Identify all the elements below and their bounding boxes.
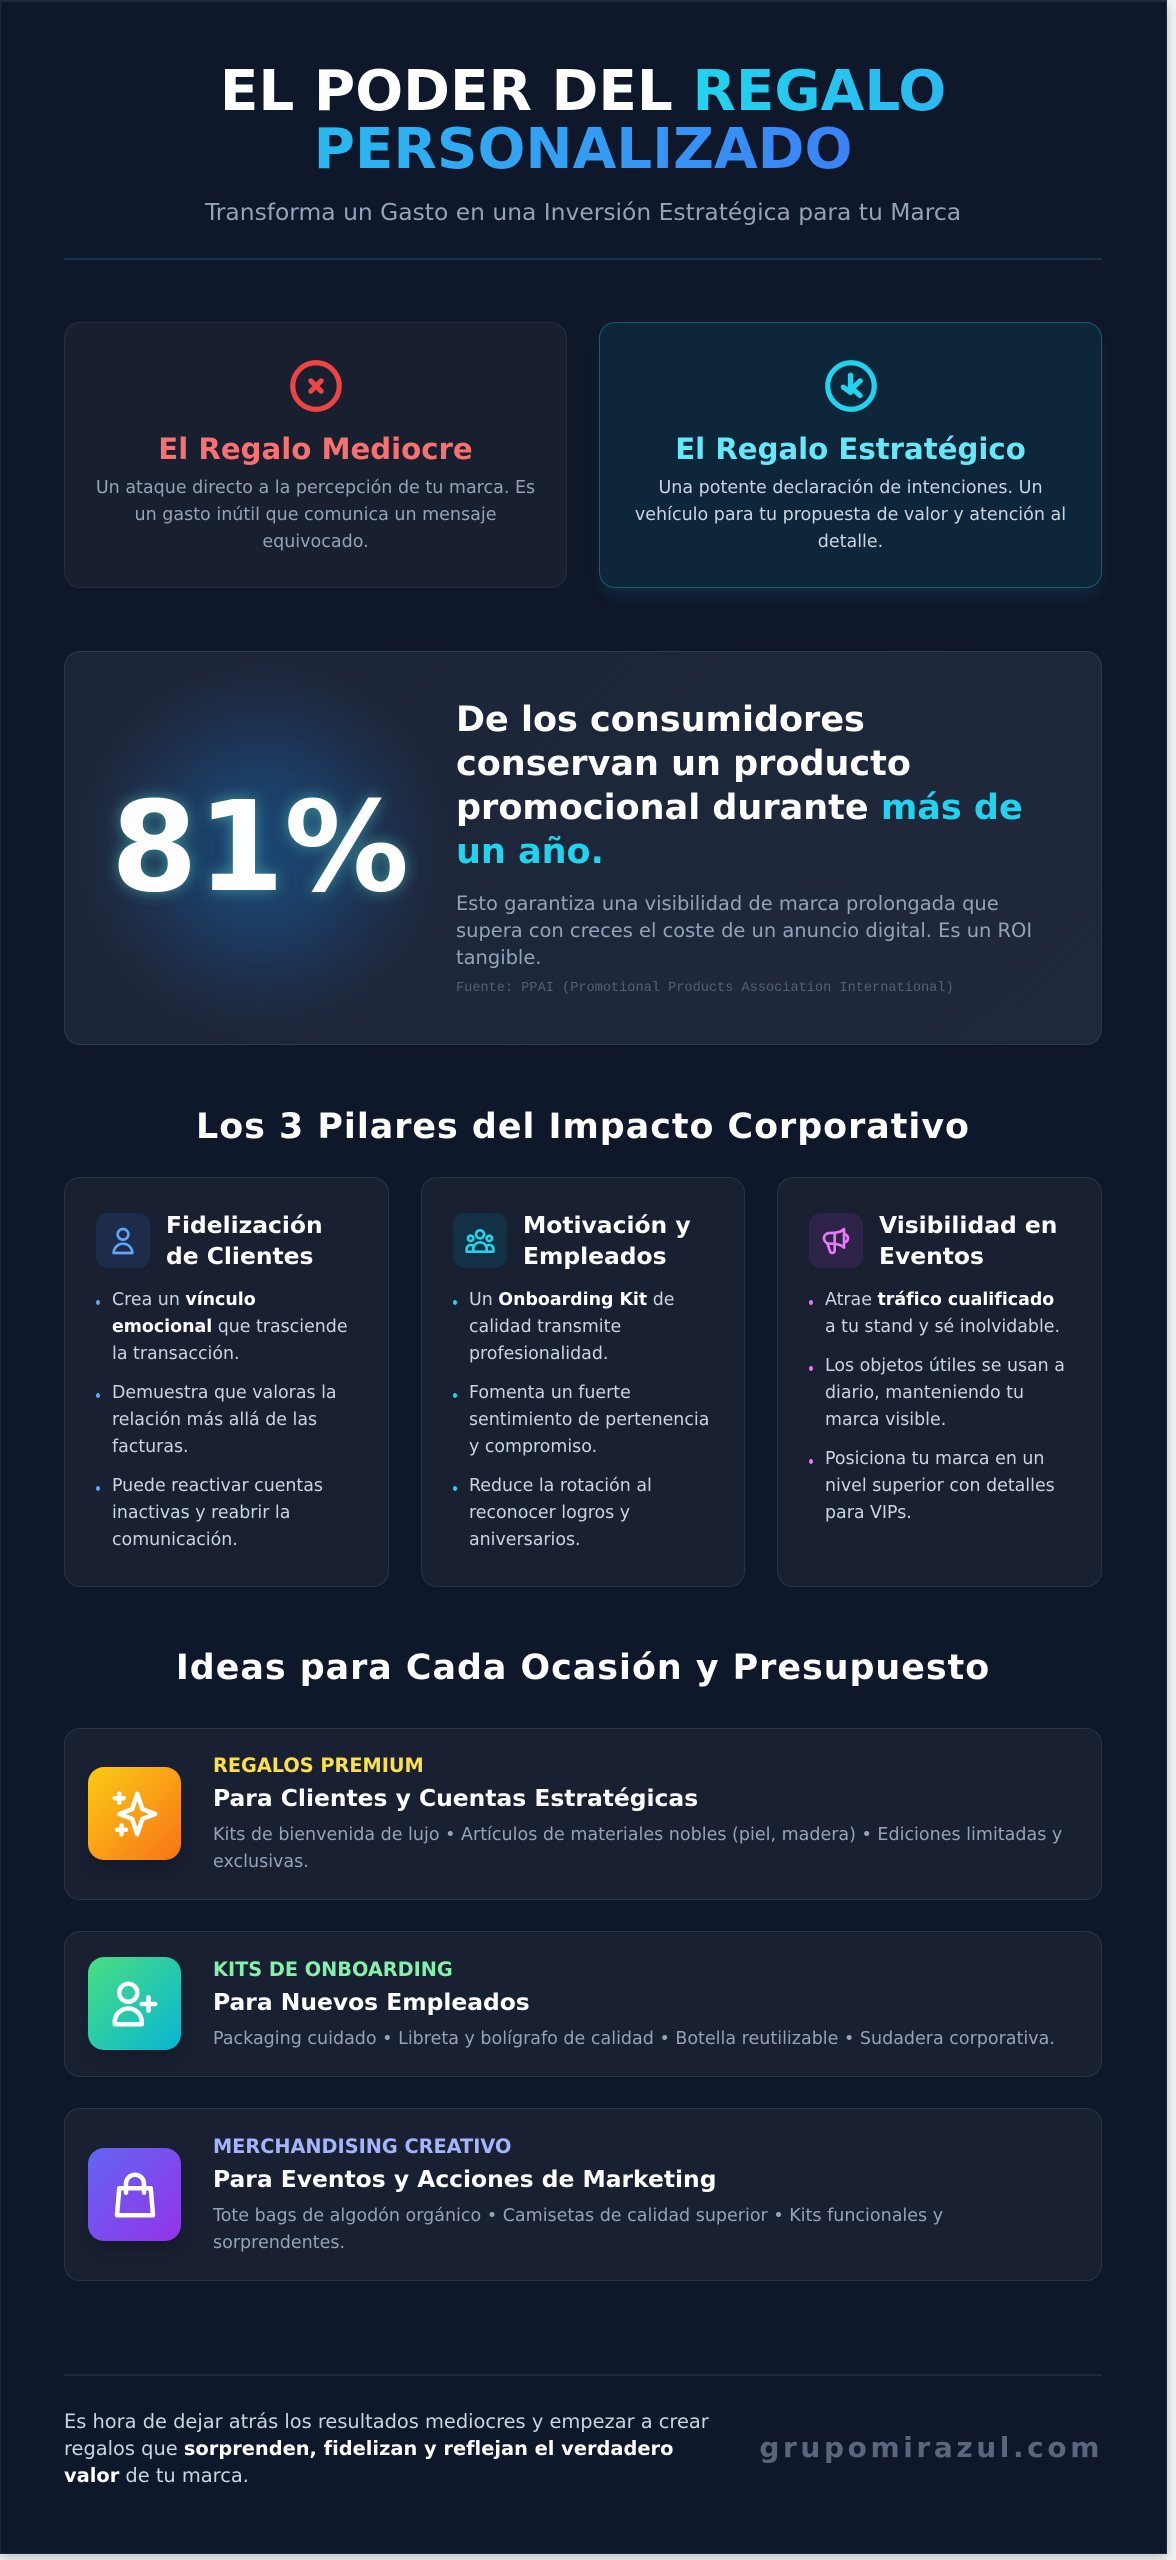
icon: user add: [88, 1957, 181, 2050]
list item 1: emocional que trasciende: [112, 1317, 348, 1337]
list item 2: [809, 1356, 1065, 1430]
description: premium: [213, 1825, 1062, 1872]
icon: megaphone: [809, 1213, 863, 1268]
bullet list: [96, 1290, 348, 1550]
heading: el regalo mediocre: El Regalo Mediocre: [158, 432, 473, 466]
list item 2: sentimiento de pertenencia: [469, 1410, 709, 1430]
icon: sparkles: [88, 1767, 181, 1860]
description: merchandising: sorprendentes.: [213, 2233, 345, 2253]
stat description: supera con creces el coste de un anuncio digital. Es un ROI: [456, 919, 1032, 942]
footer brand: grupomirazul.com: [759, 2431, 1103, 2464]
footer text: regalos que sorprenden, fidelizan y reflejan el verdadero: [64, 2437, 673, 2460]
header divider: [64, 258, 1102, 260]
list item 3: Puede reactivar cuentas: [112, 1476, 323, 1496]
heading: el regalo estratégico: El Regalo Estratégico: [675, 432, 1026, 466]
label: kits de onboarding: KITS DE ONBOARDING: [213, 1958, 453, 1981]
list item 3: Reduce la rotación al: [469, 1476, 652, 1496]
text: mediocre description: un gasto inútil que comunica un mensaje: [134, 505, 496, 525]
icon: check circle: [825, 360, 877, 412]
label: regalos premium: REGALOS PREMIUM: [213, 1754, 424, 1777]
list item 2: relación más allá de las: [112, 1410, 317, 1430]
pillar title: de Clientes: [166, 1242, 313, 1270]
list item 1: [809, 1290, 1060, 1337]
panel: regalos premium: [64, 1728, 1102, 1900]
title: [220, 59, 946, 182]
list item 2: Los objetos útiles se usan a: [825, 1356, 1065, 1376]
list item 2: diario, manteniendo tu: [825, 1383, 1024, 1403]
list item 1: [453, 1290, 674, 1364]
list item 3: para VIPs.: [825, 1503, 912, 1523]
label: merchandising creativo: MERCHANDISING CREATIVO: [213, 2135, 511, 2158]
stat heading: un año.: [456, 832, 604, 872]
footer divider: [64, 2374, 1102, 2376]
description: merchandising: Tote bags de algodón orgánico • Camisetas de calidad superior • Kits funcionales y: [213, 2206, 943, 2226]
panel: kits de onboarding: [64, 1931, 1102, 2077]
panel: merchandising creativo: [64, 2108, 1102, 2281]
list item 2: y compromiso.: [469, 1437, 597, 1457]
source note: Fuente: PPAI (Promotional Products Association International): [456, 981, 954, 996]
icon: shopping bag: [88, 2148, 181, 2241]
list item 1: Un Onboarding Kit de: [469, 1290, 674, 1310]
panel: motivación: [421, 1177, 745, 1587]
heading: pilares: Los 3 Pilares del Impacto Corporativo: [196, 1107, 970, 1147]
text: mediocre description: Un ataque directo a la percepción de tu marca. Es: [96, 478, 535, 498]
description: premium: Kits de bienvenida de lujo • Artículos de materiales nobles (piel, madera) • Ediciones limitadas y: [213, 1825, 1062, 1845]
text: mediocre description: equivocado.: [262, 532, 369, 552]
list item 3: [453, 1476, 652, 1550]
stat description: tangible.: [456, 946, 541, 969]
panel: regalo mediocre: [64, 322, 567, 588]
panel: visibilidad: [777, 1177, 1102, 1587]
list item 3: [809, 1449, 1055, 1523]
list item 2: [96, 1383, 337, 1457]
list item 1: Crea un vínculo: [112, 1290, 256, 1310]
title: EL PODER DEL REGALO: [220, 59, 946, 124]
list item 3: inactivas y reabrir la: [112, 1503, 290, 1523]
text: estratégico description: vehículo para tu propuesta de valor y atención al: [635, 505, 1066, 525]
stat description: [456, 892, 1032, 969]
list item 2: marca visible.: [825, 1410, 946, 1430]
list item 3: nivel superior con detalles: [825, 1476, 1055, 1496]
stat description: Esto garantiza una visibilidad de marca prolongada que: [456, 892, 999, 915]
pillar title: Motivación y: [523, 1211, 691, 1239]
list item 2: Demuestra que valoras la: [112, 1383, 337, 1403]
bullet list: [809, 1290, 1065, 1523]
stat heading: [456, 700, 1023, 872]
panel: estadística 81%: [64, 651, 1102, 1045]
footer text: valor de tu marca.: [64, 2464, 249, 2487]
list item 2: Fomenta un fuerte: [469, 1383, 631, 1403]
panel: regalo estratégico: [599, 322, 1102, 588]
pillar title: [523, 1211, 691, 1270]
icon: users: [453, 1213, 507, 1268]
title: empleados: Para Nuevos Empleados: [213, 1988, 530, 2016]
footer text: [64, 2410, 709, 2487]
description: merchandising: [212, 2206, 943, 2253]
text: estratégico description: [635, 478, 1066, 552]
list item 2: [453, 1383, 709, 1457]
list item 3: comunicación.: [112, 1530, 238, 1550]
text: mediocre description: [96, 478, 535, 552]
title: clientes: Para Clientes y Cuentas Estratégicas: [213, 1784, 698, 1812]
list item 1: la transacción.: [112, 1344, 240, 1364]
pillar title: Fidelización: [166, 1211, 323, 1239]
bullet list: [453, 1290, 709, 1550]
list item 1: a tu stand y sé inolvidable.: [825, 1317, 1060, 1337]
list item 3: Posiciona tu marca en un: [825, 1449, 1044, 1469]
title: eventos: Para Eventos y Acciones de Marketing: [213, 2165, 716, 2193]
pillar title: Eventos: [879, 1242, 984, 1270]
text: estratégico description: detalle.: [818, 532, 883, 552]
title: PERSONALIZADO: [314, 117, 852, 182]
description: onboarding: Packaging cuidado • Libreta y bolígrafo de calidad • Botella reutilizable • Sudadera corporativa.: [213, 2029, 1055, 2049]
icon: x circle: [290, 360, 342, 412]
stat heading: conservan un producto: [456, 744, 911, 784]
text: estratégico description: Una potente declaración de intenciones. Un: [658, 478, 1043, 498]
list item 1: profesionalidad.: [469, 1344, 608, 1364]
subtitle: Transforma un Gasto en una Inversión Estratégica para tu Marca: [205, 198, 961, 226]
stat number: 81%: [111, 775, 409, 920]
pillar title: [166, 1211, 323, 1270]
list item 1: calidad transmite: [469, 1317, 621, 1337]
list item 3: aniversarios.: [469, 1530, 581, 1550]
icon: user: [96, 1213, 150, 1268]
panel: fidelización: [64, 1177, 389, 1587]
list item 2: facturas.: [112, 1437, 189, 1457]
pillar title: Empleados: [523, 1242, 666, 1270]
stat heading: De los consumidores: [456, 700, 865, 740]
heading: ideas: Ideas para Cada Ocasión y Presupuesto: [176, 1648, 990, 1688]
pillar title: Visibilidad en: [879, 1211, 1057, 1239]
pillar title: [879, 1211, 1057, 1270]
description: premium: exclusivas.: [213, 1852, 309, 1872]
footer text: Es hora de dejar atrás los resultados mediocres y empezar a crear: [64, 2410, 709, 2433]
list item 3: [96, 1476, 323, 1550]
list item 1: [96, 1290, 348, 1364]
list item 3: reconocer logros y: [469, 1503, 630, 1523]
stat heading: promocional durante más de: [456, 788, 1023, 828]
list item 1: Atrae tráfico cualificado: [825, 1290, 1054, 1310]
